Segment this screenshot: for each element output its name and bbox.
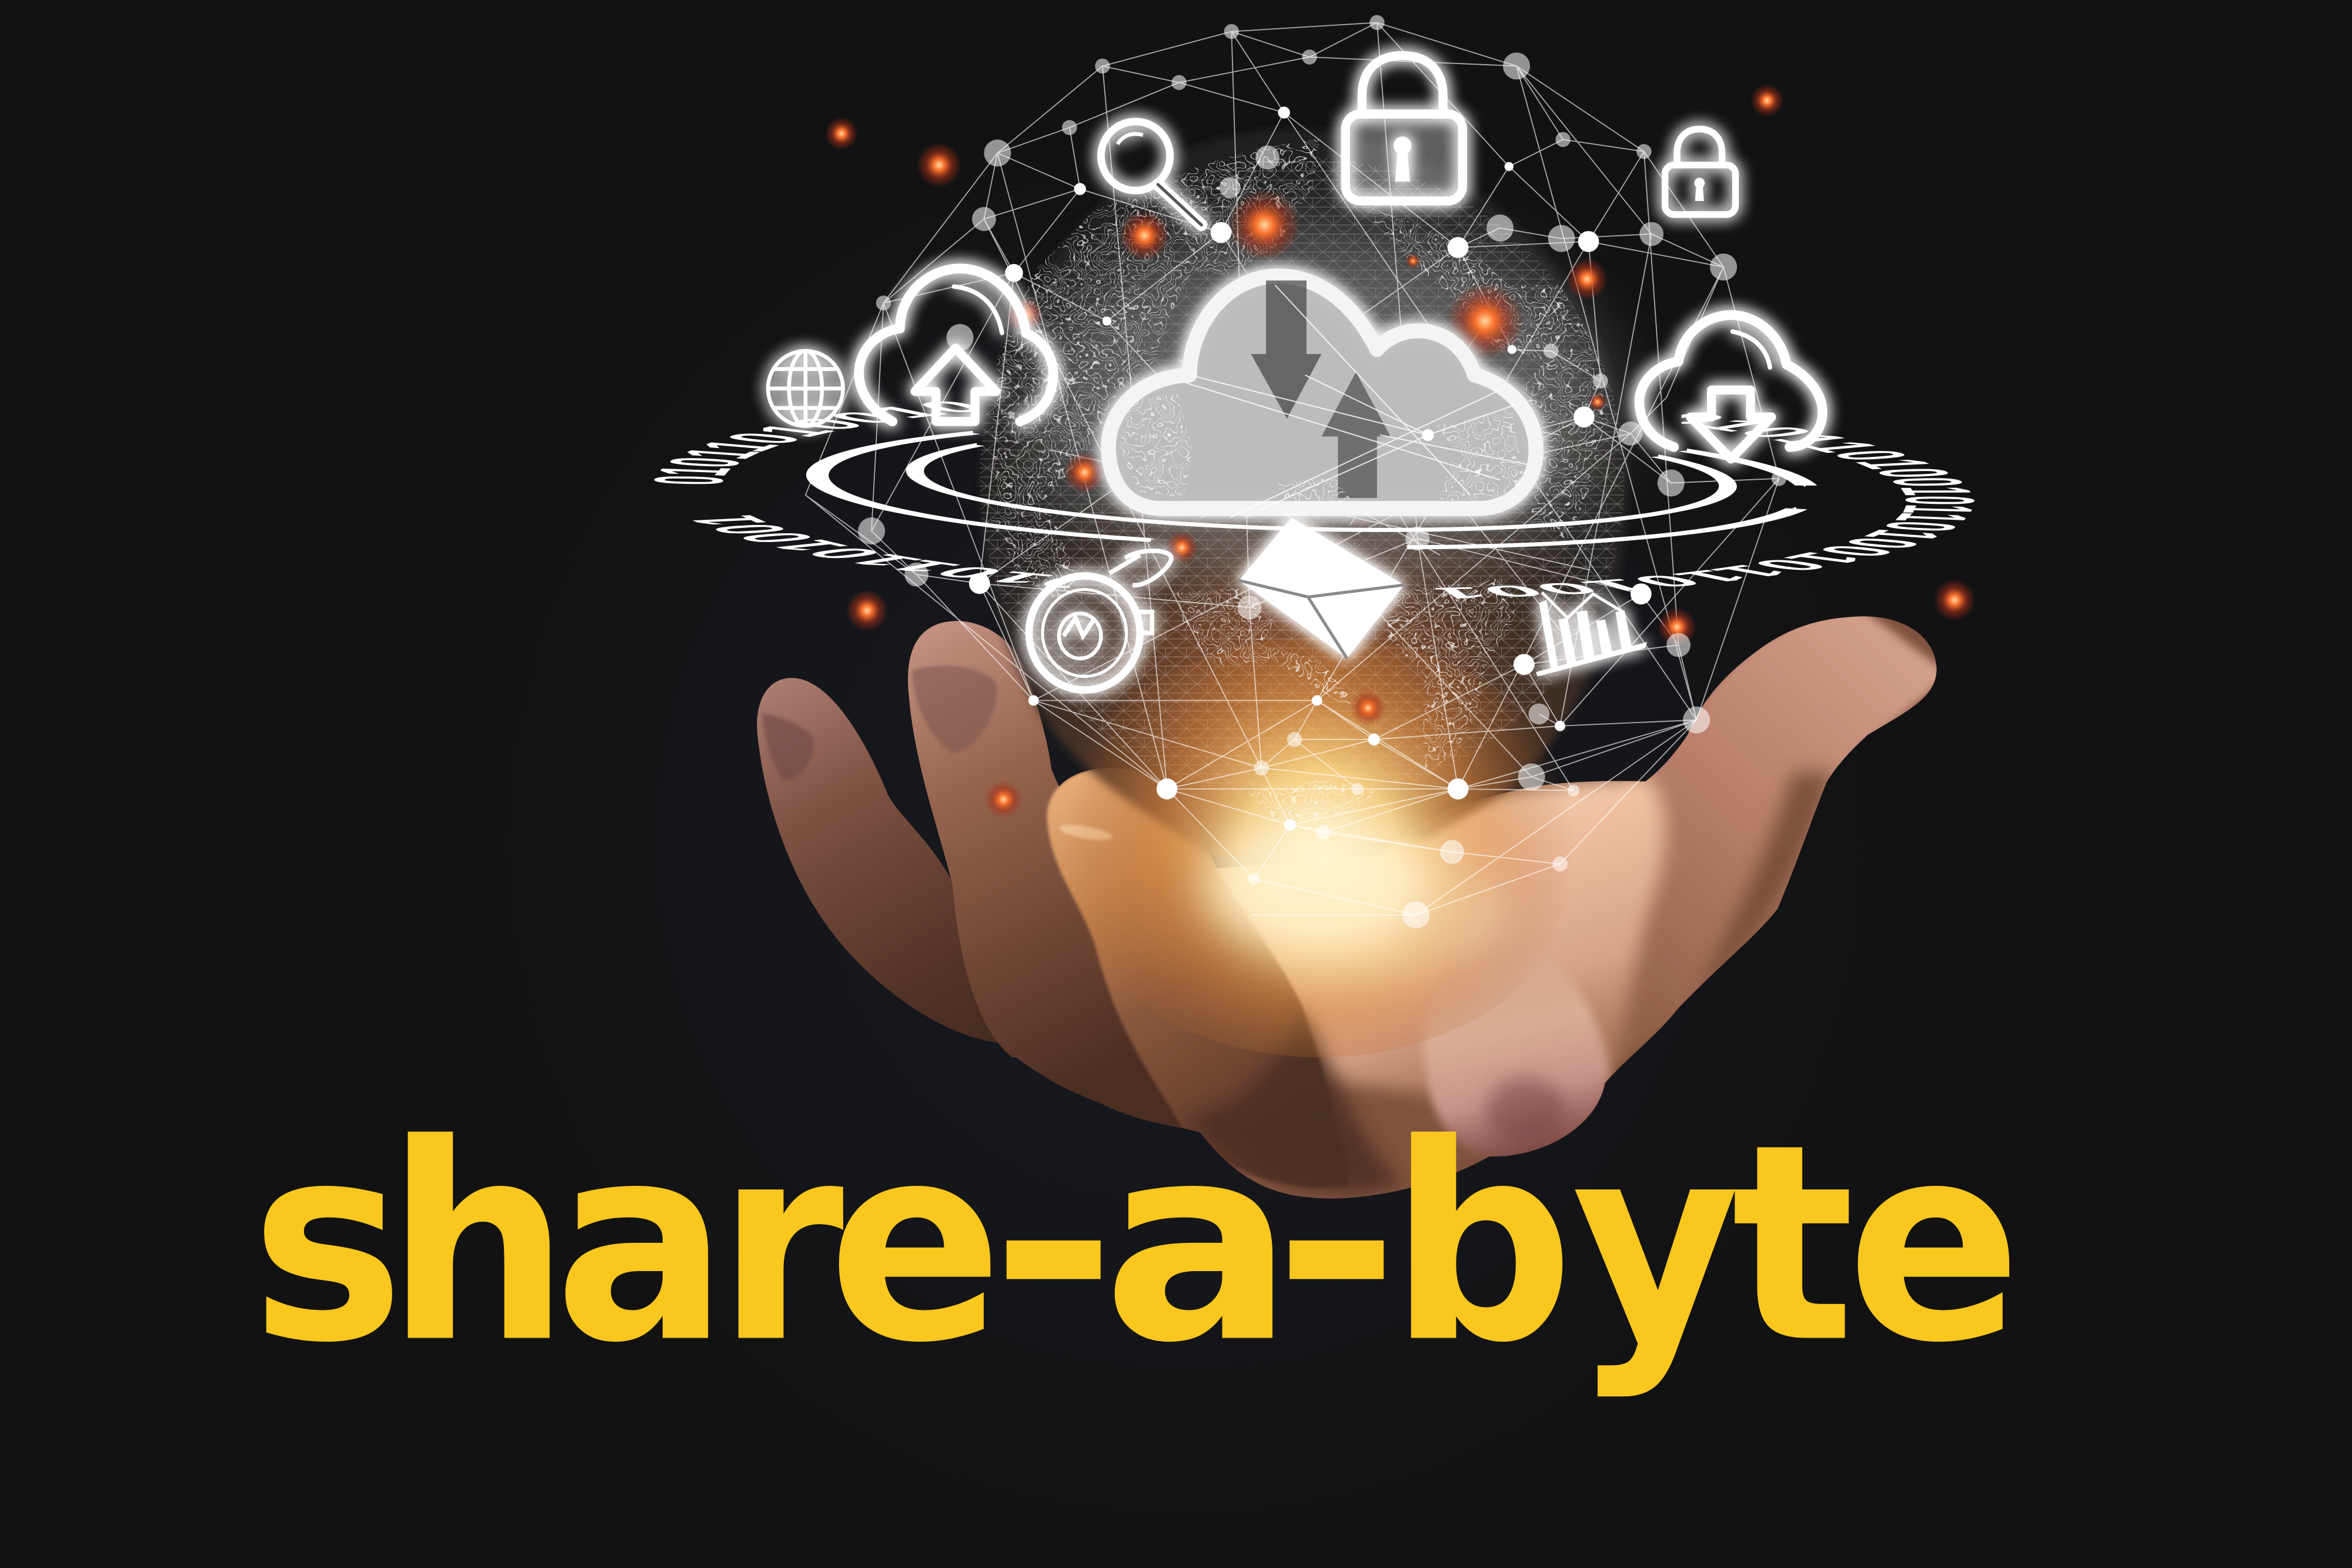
upper thumb	[1618, 616, 1937, 1063]
network nodes	[858, 15, 1786, 928]
ring finger	[908, 621, 1200, 1132]
pinky nail	[762, 713, 814, 780]
title: byte	[1389, 1086, 2022, 1402]
title: share	[251, 1086, 1003, 1402]
orbit: binary data ring: 010110100101101001011010010110100101101001011010010110100101101001	[654, 401, 1975, 599]
cloud body	[1108, 276, 1536, 509]
title: -	[990, 1086, 1117, 1402]
icon: bar chart	[1536, 593, 1647, 677]
shadow under palm base	[1185, 1005, 1402, 1192]
icon: upload cloud	[859, 269, 1053, 422]
palm spill light	[1208, 817, 1432, 952]
icon: magnifier	[1101, 122, 1201, 225]
palm	[1200, 777, 1665, 1095]
hand base	[757, 616, 1937, 1198]
download arrow	[1251, 280, 1321, 419]
map detail on cloud	[1119, 393, 1524, 507]
lower thumb mound	[1424, 934, 1608, 1160]
central grey halo	[1035, 232, 1605, 577]
ring nail	[912, 666, 997, 753]
icon: large padlock	[1345, 55, 1462, 201]
icon: small padlock	[1665, 129, 1736, 215]
thumb outer shade	[1695, 773, 1833, 1005]
cloud network strands	[1185, 285, 1530, 517]
photo: open hand	[757, 616, 1937, 1198]
pinky finger	[757, 678, 997, 1042]
upload arrow	[1321, 372, 1391, 498]
front finger	[1047, 768, 1350, 1188]
warm core glow	[1050, 637, 1590, 1058]
globe mesh texture	[980, 158, 1625, 803]
palm highlight	[1269, 847, 1517, 998]
world map outlines	[990, 138, 1608, 820]
lower palm shade	[1440, 1020, 1680, 1200]
network lines	[806, 22, 1779, 915]
title	[251, 1086, 2022, 1402]
front finger nail glint	[1058, 822, 1114, 843]
icon: central cloud with arrows	[1108, 276, 1536, 517]
icon: download cloud	[1639, 315, 1822, 459]
title: a	[1102, 1086, 1295, 1402]
thumb tip red shade	[1486, 1077, 1565, 1143]
icon: stopwatch	[1029, 551, 1171, 690]
orbit: solid rings	[816, 430, 1807, 555]
title: -	[1273, 1086, 1400, 1402]
icon: globe	[768, 351, 843, 426]
icon: envelope	[1239, 517, 1404, 658]
hologram sphere backdrop	[980, 129, 1628, 1058]
orange sparks	[825, 84, 1976, 819]
